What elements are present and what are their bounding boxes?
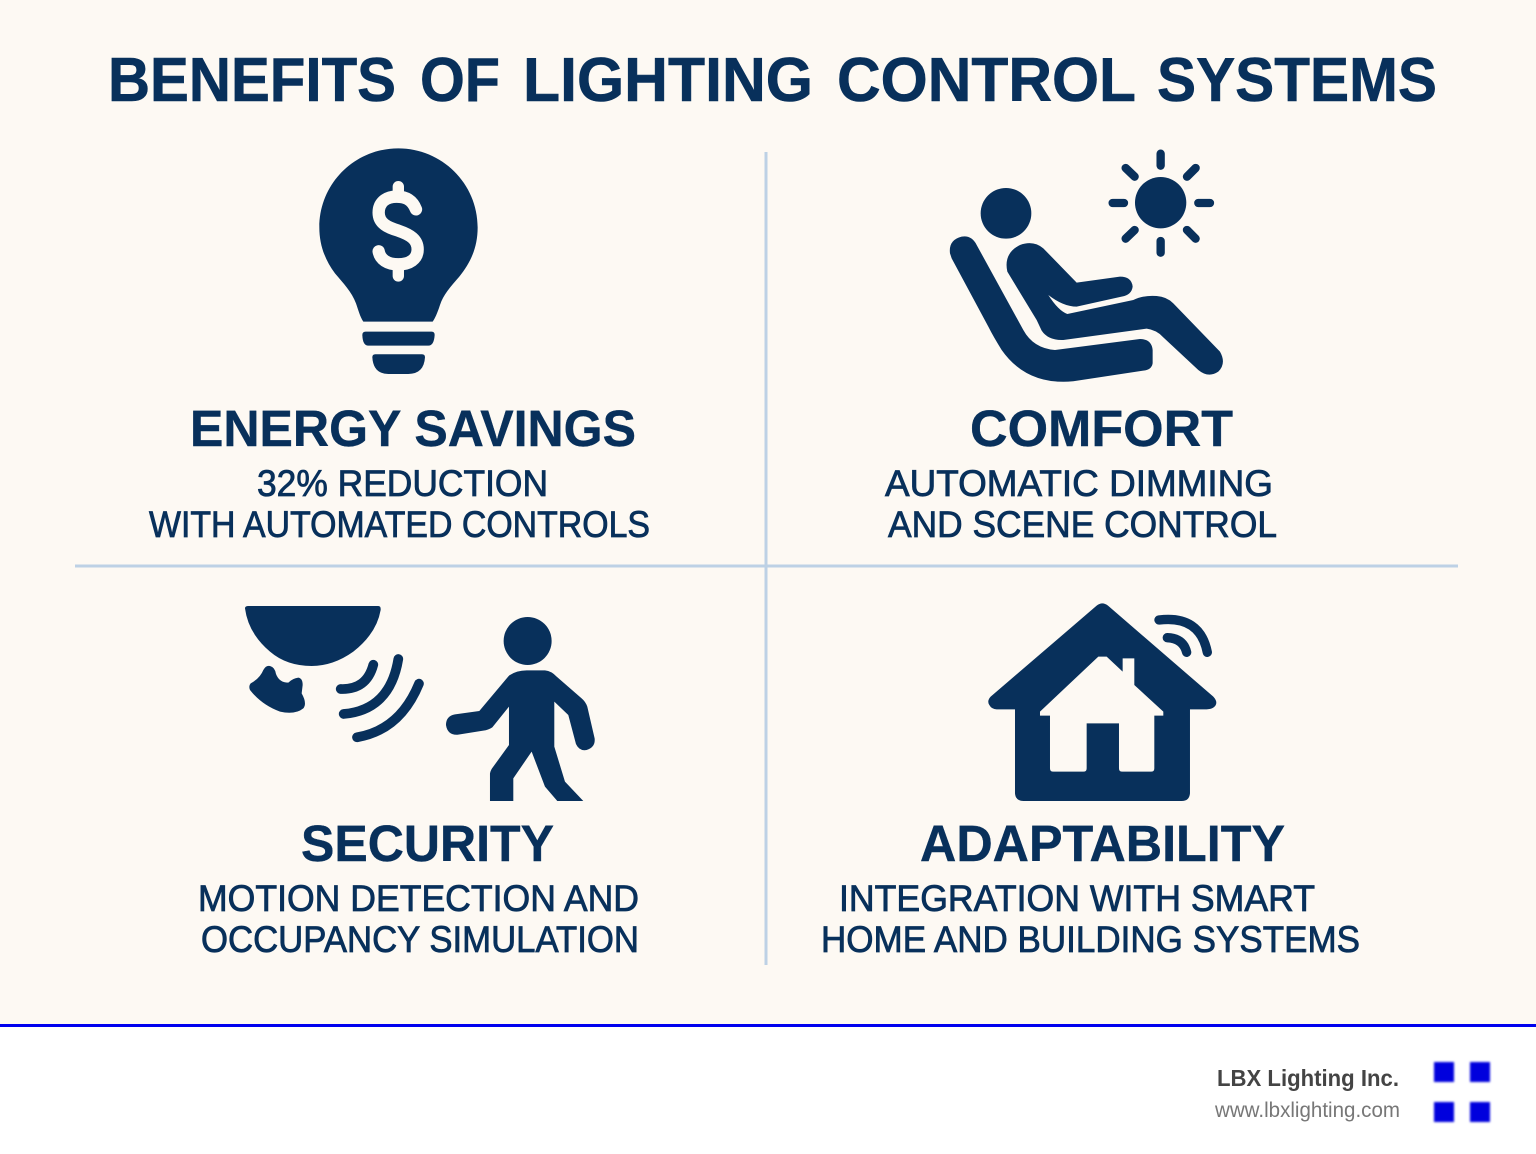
title: LIGHTING (523, 46, 813, 115)
title: OF (420, 46, 500, 115)
text: comfort detail: AND SCENE CONTROL (888, 504, 1277, 545)
icon: smart home with wifi (988, 603, 1216, 801)
website: www.lbxlighting.com (1214, 1099, 1400, 1122)
text: adaptability detail: INTEGRATION WITH SMART (839, 878, 1315, 919)
text: energy savings detail: 32% REDUCTION (257, 463, 548, 504)
icon: person reclining in chair with sun (950, 154, 1223, 382)
heading: adaptability: ADAPTABILITY (920, 815, 1285, 872)
panel: comfort (885, 154, 1277, 545)
icon: four blue squares logo (1434, 1062, 1490, 1122)
panel: adaptability (821, 603, 1360, 960)
text: comfort detail: AUTOMATIC DIMMING (885, 463, 1273, 504)
footer (0, 1024, 1536, 1122)
panel: energy savings (149, 148, 650, 545)
text: security detail: MOTION DETECTION AND (198, 878, 639, 919)
text: energy savings detail (149, 463, 650, 545)
panel: security (198, 606, 639, 960)
icon: light bulb with dollar sign (319, 148, 478, 374)
heading: security: SECURITY (301, 815, 554, 872)
text: comfort detail (885, 463, 1277, 545)
title: CONTROL (837, 46, 1136, 115)
text: adaptability detail: HOME AND BUILDING SYSTEMS (821, 919, 1360, 960)
heading: comfort: COMFORT (970, 400, 1233, 457)
title: SYSTEMS (1157, 46, 1437, 115)
icon: motion sensor and walking person (245, 606, 595, 801)
heading: energy savings: ENERGY SAVINGS (190, 400, 636, 457)
text: security detail: OCCUPANCY SIMULATION (201, 919, 639, 960)
text: adaptability detail (821, 878, 1360, 960)
text: energy savings detail: WITH AUTOMATED CONTROLS (149, 504, 650, 545)
text: security detail (198, 878, 639, 960)
title: BENEFITS (108, 46, 396, 115)
company name: LBX Lighting Inc. (1217, 1065, 1399, 1091)
title (108, 46, 1437, 115)
